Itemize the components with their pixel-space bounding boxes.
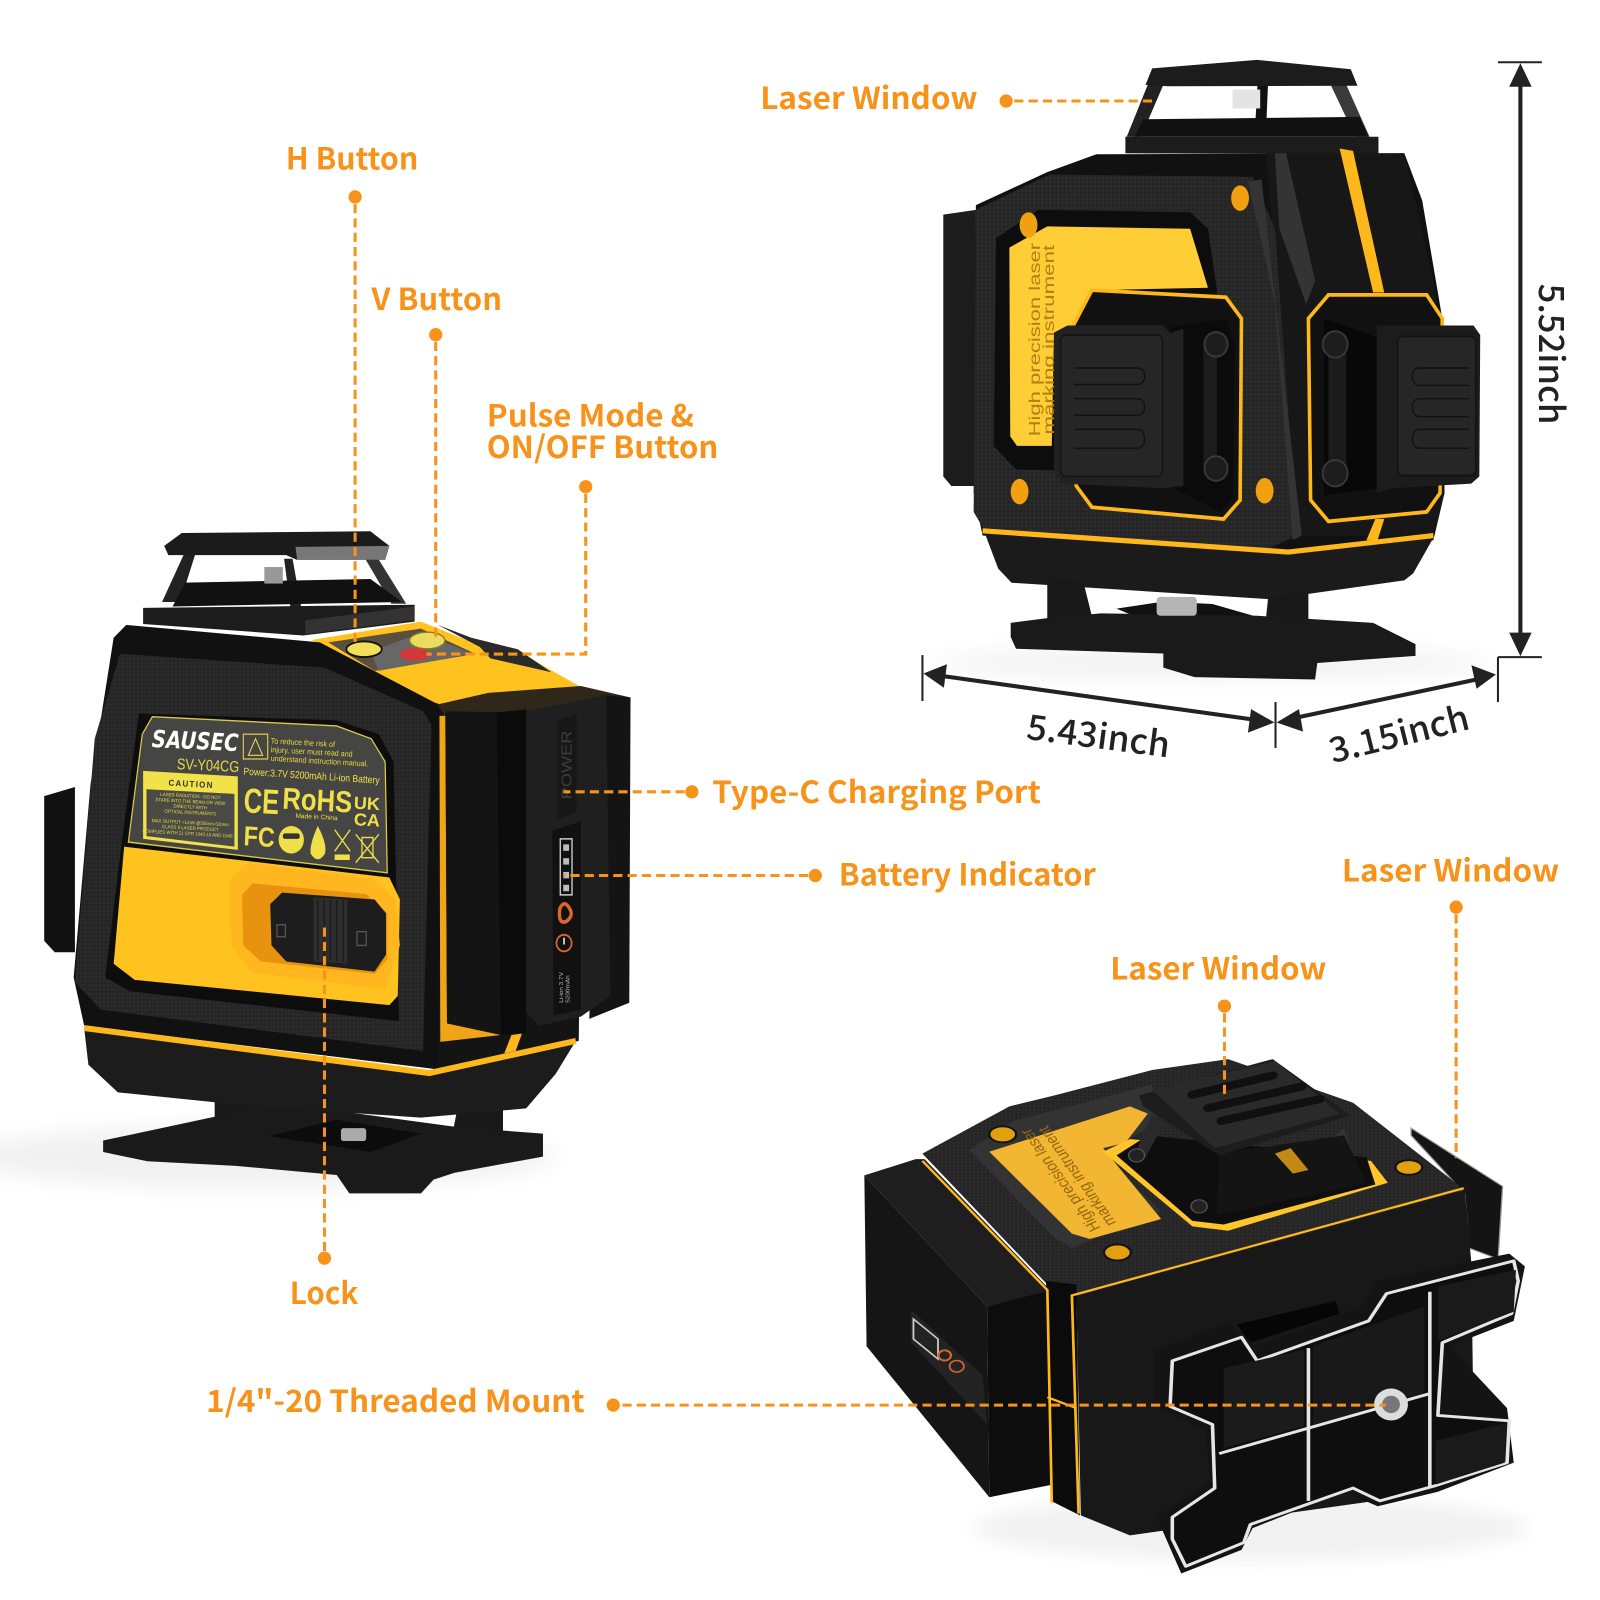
battery pack	[864, 1159, 1053, 1497]
rear clip	[1411, 1128, 1503, 1259]
dimension: width 3.15 inch	[1277, 665, 1496, 773]
warning text: injury, user must read and	[271, 745, 353, 759]
H button	[346, 641, 382, 657]
caution box: OPTICAL INSTRUMENTS	[164, 808, 216, 817]
callout: Lock: Lock	[290, 1268, 359, 1313]
battery indicator panel: 5200mAh	[565, 975, 571, 1003]
callout: threaded mount: 1/4"-20 Threaded Mount	[206, 1376, 585, 1421]
caution box	[142, 771, 239, 850]
corner screw holes	[1011, 185, 1274, 504]
module frame	[1103, 1139, 1388, 1231]
callout: Battery Indicator	[563, 850, 1097, 895]
warning text: understand instruction manual.	[271, 754, 368, 768]
callout: V Button	[370, 274, 502, 639]
yellow trim lines	[922, 1161, 1464, 1514]
compliance marks	[243, 782, 380, 853]
backing behind battery	[421, 687, 583, 1074]
pulse and power button	[399, 648, 430, 661]
floor shadow	[936, 646, 1489, 679]
laser warning triangle	[243, 734, 268, 759]
dimension: height 5.52 inch: 5.52inch	[1529, 284, 1579, 424]
battery indicator panel: Li-ion 3.7V	[558, 971, 565, 1003]
base feet	[103, 1092, 543, 1193]
lower housing	[84, 1028, 577, 1118]
right laser module	[1308, 295, 1480, 521]
dimension: width 3.15 inch: 3.15inch	[1323, 690, 1474, 773]
lock recess	[242, 883, 387, 974]
textured front panel	[974, 175, 1297, 550]
callout: Laser Window top	[760, 73, 1153, 118]
recessed area	[105, 714, 399, 1021]
caution box: COMPLIES WITH 21 CFR 1040.10 AND 1040.11	[142, 828, 239, 839]
main housing	[74, 625, 443, 1069]
lock slider	[270, 893, 386, 972]
callout: Type-C Charging Port	[563, 767, 1041, 812]
callout: Pulse Mode and ON/OFF Button: Pulse Mode &	[487, 391, 694, 436]
lock bezel	[229, 863, 400, 989]
caution box: LASER RADIATION - DO NOT	[160, 792, 221, 800]
warning text: To reduce the risk of	[271, 736, 336, 749]
rear mounting clip	[44, 787, 75, 952]
textured side panel	[75, 654, 431, 1051]
angled trim accent	[504, 1034, 522, 1053]
product: front-angled view of laser level	[936, 60, 1489, 679]
power port cover: POWER	[559, 730, 575, 799]
yellow panel with engraved text: High precision laser	[1026, 242, 1044, 436]
mounting plate	[1154, 1254, 1525, 1574]
callout: V Button: V Button	[370, 274, 502, 319]
rear clip plate	[943, 210, 976, 486]
product: left view of laser level	[0, 531, 631, 1193]
power specification: Power:3.7V 5200mAh Li-ion Battery	[243, 766, 380, 787]
callout: threaded mount	[206, 1376, 1386, 1421]
yellow panel with engraved text	[1009, 226, 1208, 446]
product: top-rear view of laser level	[864, 1059, 1527, 1574]
yellow trim stripe	[84, 1028, 576, 1073]
battery pack	[438, 686, 631, 1042]
brand name: SAUSEC	[151, 726, 239, 757]
yellow top panel with engraved text: High precision laser	[1017, 1126, 1105, 1234]
top laser module	[1129, 1059, 1366, 1215]
lower housing	[985, 533, 1433, 599]
top yellow control panel	[311, 622, 583, 704]
body shell	[974, 153, 1445, 559]
dimension: height 5.52 inch	[1498, 62, 1579, 702]
right side face	[1266, 153, 1445, 536]
top handle and laser window	[143, 531, 415, 635]
lower yellow trim accent	[1366, 519, 1384, 540]
corner column	[1046, 1281, 1080, 1515]
yellow trim stripe	[983, 531, 1433, 552]
recess	[994, 210, 1217, 474]
callout: Laser Window top: Laser Window	[760, 73, 978, 118]
callout: Battery Indicator: Battery Indicator	[839, 850, 1097, 895]
yellow panel with engraved text: marking instrument	[1039, 244, 1058, 435]
compliance marks: UK	[353, 793, 380, 814]
callout: Pulse Mode and ON/OFF Button: ON/OFF Button	[487, 422, 718, 467]
callout: H Button: H Button	[286, 133, 418, 178]
callout: H Button	[286, 133, 418, 645]
screw holes	[989, 1126, 1422, 1261]
bevel bands	[1248, 153, 1315, 540]
callout: Type-C Charging Port: Type-C Charging Port	[712, 767, 1041, 812]
vertical yellow trim	[1340, 149, 1384, 292]
housing slot	[1237, 1301, 1340, 1343]
yellow top panel with engraved text: marking instrument	[1035, 1123, 1120, 1228]
yellow top panel with engraved text	[989, 1106, 1161, 1239]
dimension: length 5.43 inch: 5.43inch	[1024, 699, 1173, 767]
callout: Pulse Mode and ON/OFF Button	[427, 391, 718, 654]
rear housing	[1076, 1190, 1474, 1535]
dimension: length 5.43 inch	[922, 655, 1276, 767]
callout: Laser Window middle: Laser Window	[1110, 944, 1327, 989]
left laser module	[1054, 290, 1241, 519]
callout: Laser Window right	[1342, 846, 1559, 1158]
recessed top area	[969, 1085, 1161, 1248]
model number: SV-Y04CG	[177, 756, 240, 776]
battery indicator panel	[552, 821, 581, 1015]
callout: Laser Window right: Laser Window	[1342, 846, 1559, 891]
caution box: STARE INTO THE BEAM OR VIEW	[155, 797, 226, 806]
compliance marks: FC	[243, 820, 276, 853]
callout: Lock	[290, 927, 359, 1313]
V button	[410, 632, 445, 649]
compliance marks: Made in China	[295, 813, 338, 822]
compliance marks: CE	[243, 782, 280, 823]
safety icons	[279, 826, 379, 863]
product label	[128, 717, 387, 873]
power port cover	[558, 714, 577, 819]
top housing	[922, 1059, 1469, 1294]
yellow side panel	[114, 847, 400, 1005]
floor shadow	[0, 1124, 556, 1189]
top handle and laser window	[1125, 60, 1378, 154]
floor shadow	[974, 1495, 1527, 1561]
caution box: CAUTION	[168, 777, 214, 790]
compliance marks: CA	[353, 809, 380, 831]
compliance marks: RoHS	[282, 783, 353, 820]
base feet	[1011, 578, 1416, 679]
caution box: MAX OUTPUT <1mW @505nm-520nm	[152, 818, 229, 827]
callout: Laser Window middle	[1110, 944, 1327, 1097]
caution box: DIRECTLY WITH	[173, 803, 207, 811]
module recess	[1117, 1135, 1375, 1225]
caution box: CLASS II LASER PRODUCT	[162, 824, 219, 832]
warning text	[271, 736, 368, 768]
